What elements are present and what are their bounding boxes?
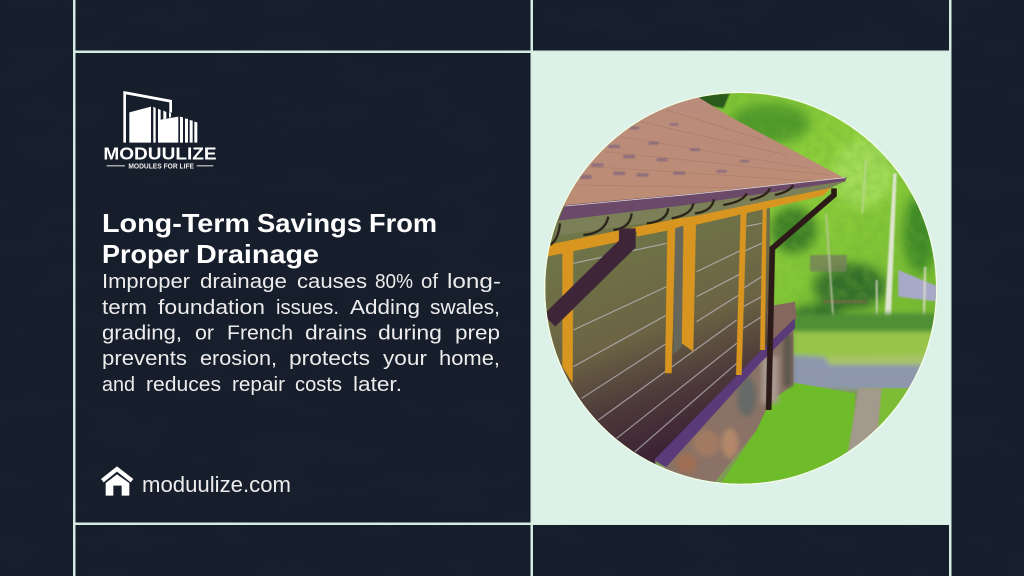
- roof: [563, 98, 844, 206]
- heading: Long-Term: [102, 208, 250, 238]
- foundation base: [664, 330, 794, 482]
- downpipes: [549, 188, 834, 410]
- body text: issues.: [276, 296, 339, 319]
- stone foundation: [677, 333, 792, 473]
- body text: erosion,: [200, 347, 277, 370]
- heading: Savings: [257, 208, 362, 238]
- body text: home,: [439, 347, 500, 370]
- gutter: [550, 177, 847, 245]
- body text: protects: [289, 347, 370, 370]
- body text: French: [227, 322, 293, 344]
- body text: [102, 270, 501, 396]
- body text: 80%: [375, 270, 413, 293]
- heading: Drainage: [196, 239, 319, 269]
- body text: prep: [455, 322, 500, 344]
- lawn, gravel and path: [790, 313, 943, 392]
- body text: Adding: [350, 296, 420, 319]
- body text: long-: [447, 270, 501, 293]
- window: [673, 226, 683, 355]
- front grass: [863, 388, 908, 428]
- roof shingles: [577, 110, 830, 188]
- body text: and: [102, 373, 135, 396]
- body text: Improper: [102, 270, 190, 293]
- heading: Proper: [102, 239, 189, 269]
- icon: modular building: [123, 91, 197, 143]
- logo: [103, 91, 217, 170]
- heading: From: [369, 208, 437, 238]
- body text: prevents: [102, 347, 187, 370]
- body text: during: [378, 322, 442, 344]
- body text: your: [383, 347, 427, 370]
- body text: reduces: [146, 373, 221, 396]
- logo wordmark: MODUULIZE: [103, 144, 217, 164]
- ground underlay: [554, 346, 927, 484]
- photo: house with gutter: [544, 92, 938, 485]
- logo tagline: MODULES FOR LIFE: [128, 161, 194, 170]
- body text: grading,: [102, 322, 182, 344]
- body text: drainage: [200, 270, 287, 293]
- body text: causes: [297, 270, 367, 293]
- grass strip: [710, 383, 855, 500]
- balcony rail: [767, 302, 797, 340]
- wall siding: [546, 196, 770, 464]
- heading: [102, 208, 437, 269]
- body text: or: [195, 322, 214, 344]
- body text: repair: [232, 373, 285, 396]
- panel: image background: [532, 52, 950, 524]
- wooden trim: [547, 187, 832, 383]
- siding lines: [573, 223, 762, 452]
- fascia band: [654, 318, 795, 467]
- body text: costs: [295, 373, 342, 396]
- body text: of: [421, 270, 438, 293]
- body text: drains: [305, 322, 367, 344]
- forest backdrop: [530, 80, 950, 367]
- body text: term: [102, 296, 147, 319]
- roof dark tiles: [580, 123, 749, 179]
- website footer: [101, 466, 291, 497]
- icon: house: [101, 466, 133, 496]
- stone path: [847, 388, 882, 460]
- body text: foundation: [158, 296, 265, 319]
- body text: swales,: [430, 296, 500, 319]
- website url: moduulize.com: [142, 472, 291, 497]
- body text: later.: [353, 373, 402, 396]
